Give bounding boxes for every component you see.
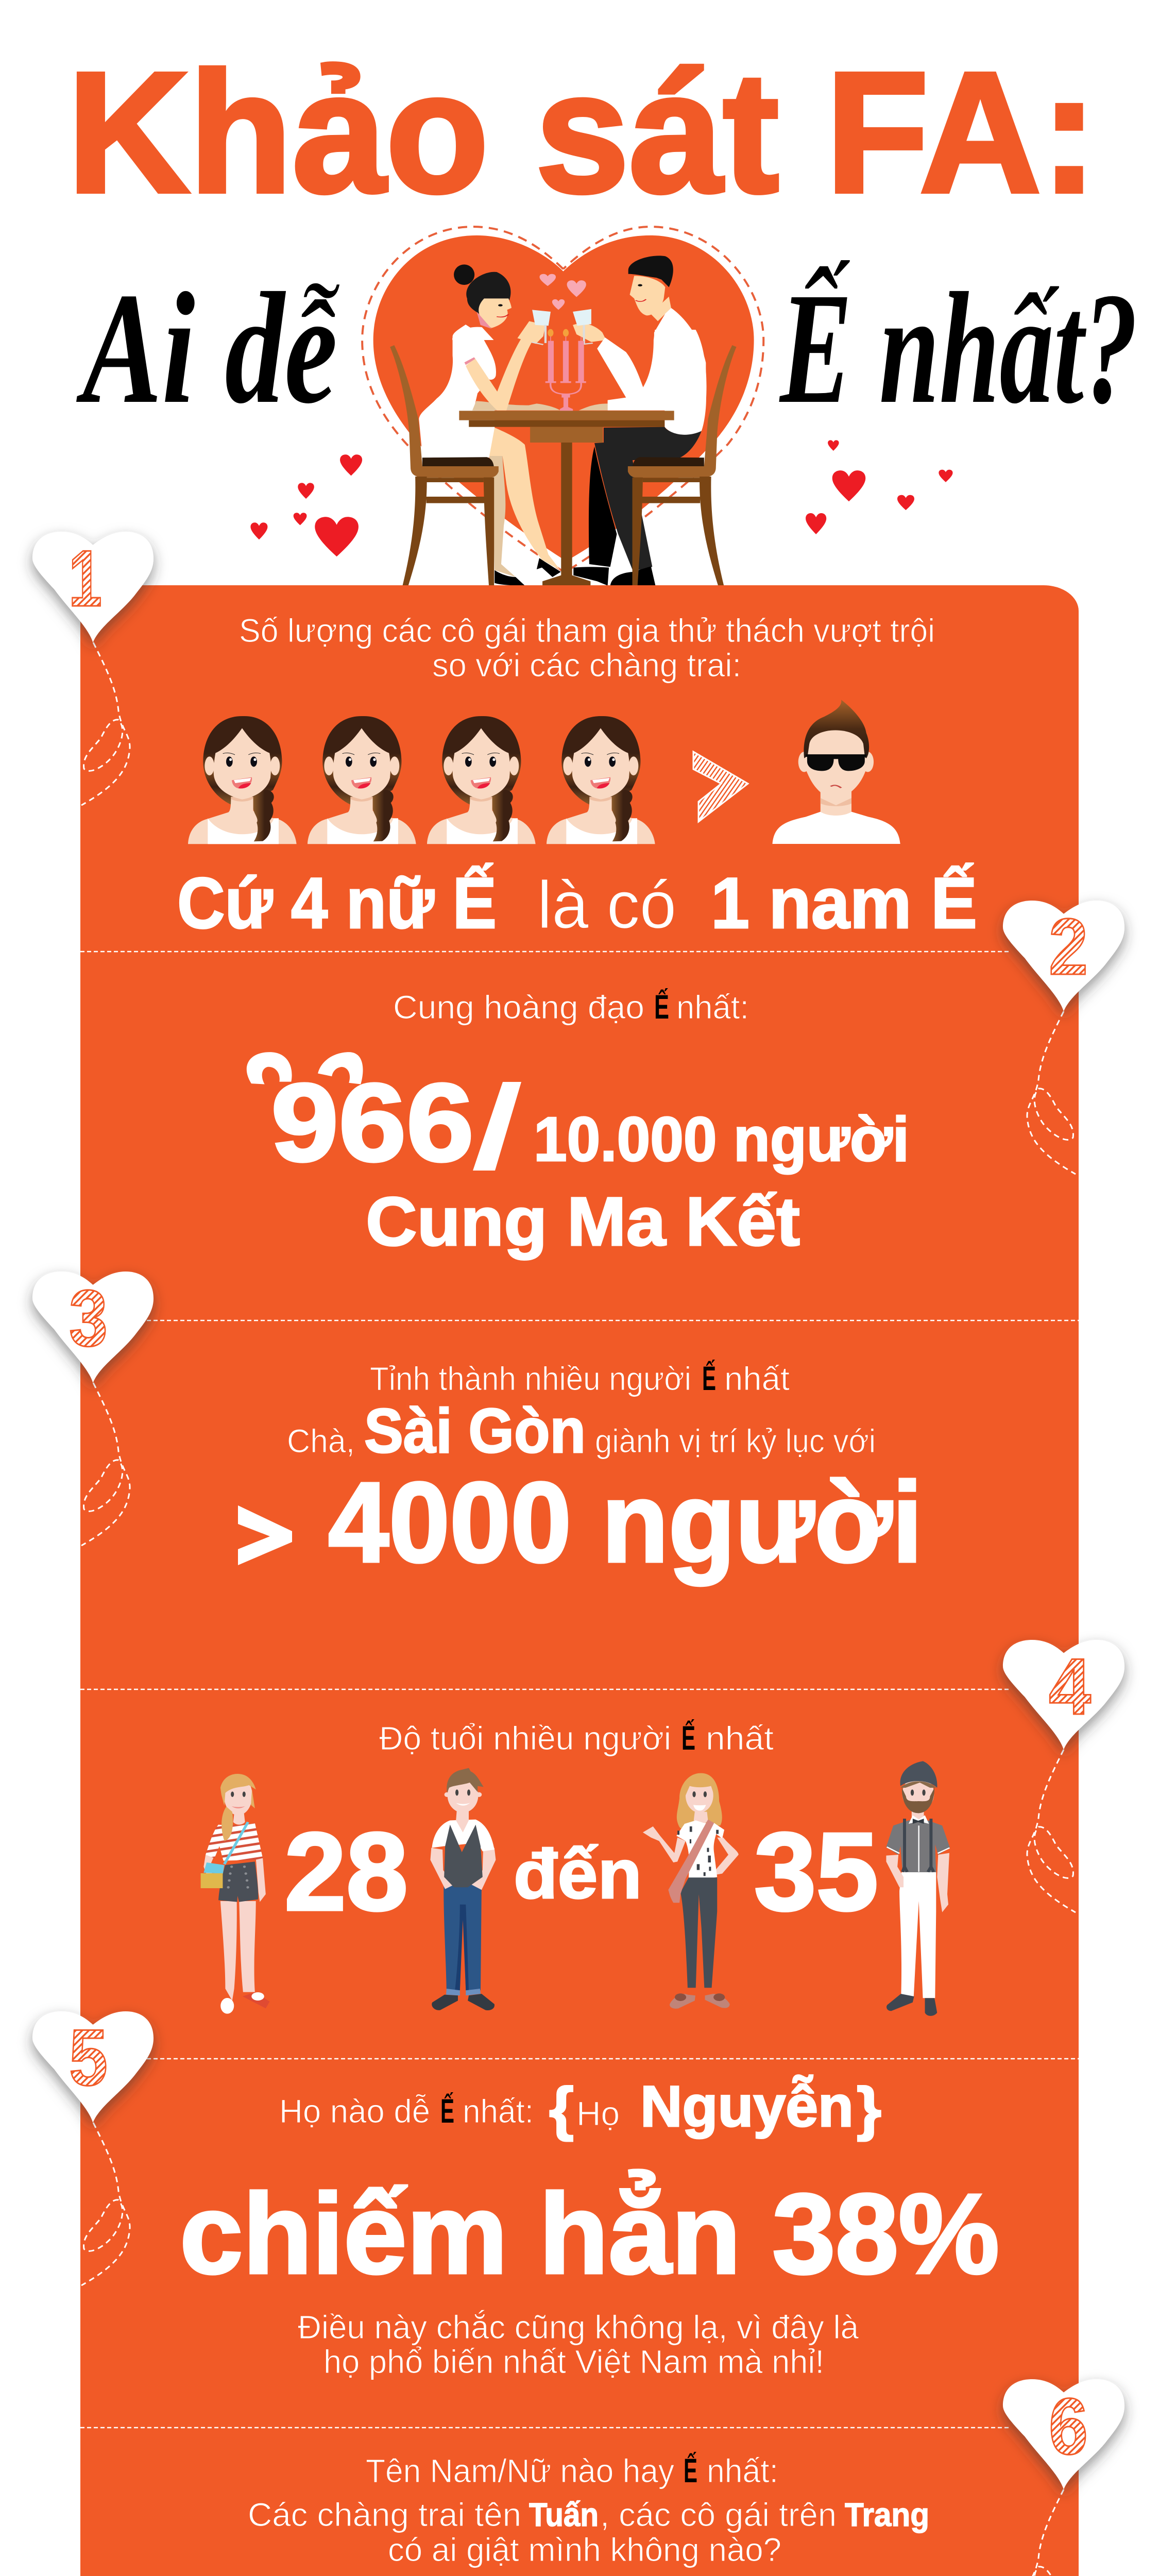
section 6: names sentence: Các chàng trai tên xyxy=(248,2496,521,2533)
section 5: note: họ phổ biến nhất Việt Nam mà nhỉ! xyxy=(323,2343,824,2380)
section 6: heading: Tên Nam/Nữ nào hay xyxy=(366,2452,674,2489)
stat: 966 of 10,000: 10.000 người xyxy=(534,1104,909,1174)
section dividers xyxy=(80,952,1079,2576)
section 6: names sentence xyxy=(248,2496,929,2568)
heart backdrop xyxy=(362,227,763,572)
section 6: names sentence: Trang xyxy=(845,2496,929,2533)
panel: orange survey card xyxy=(80,585,1079,2576)
stat: 38 percent: chiếm hẳn 38% xyxy=(180,2170,999,2297)
character: girl in striped top xyxy=(201,1774,270,2014)
section 6: names sentence: Tuấn xyxy=(529,2496,599,2533)
heart badge 5: 5 xyxy=(69,2013,108,2102)
script subtitle left: Ai dễ xyxy=(75,260,340,437)
heart badge 3: 3 xyxy=(69,1274,108,1363)
section 6: heading: nhất: xyxy=(707,2452,778,2489)
stat: over 4000 people: 4000 người xyxy=(328,1459,923,1586)
headline: 4 women per 1 man xyxy=(177,862,977,943)
icon: boy with sunglasses xyxy=(772,700,900,844)
heart badge 1: 1 xyxy=(69,534,102,623)
section 6: names sentence: , các cô gái trên xyxy=(600,2496,837,2533)
section 4: heading: Ế xyxy=(681,1719,695,1757)
section 4: heading: Độ tuổi nhiều người xyxy=(379,1720,671,1757)
section 5: heading with surname: { xyxy=(549,2076,574,2142)
section 3: Saigon sentence: Chà, xyxy=(287,1422,355,1460)
section 3: heading: Ế xyxy=(702,1359,716,1397)
section 2: heading: Ế xyxy=(654,988,669,1026)
section 5: heading with surname: Nguyễn xyxy=(640,2074,854,2139)
heart badge 5 xyxy=(32,2011,154,2123)
decorative red hearts xyxy=(250,440,953,556)
section 1: intro text xyxy=(239,612,935,684)
section 2: heading xyxy=(393,988,749,1026)
heart badge 1 xyxy=(32,532,154,642)
heart trail lines xyxy=(81,642,1076,2576)
section 5: heading with surname: Ế xyxy=(440,2092,454,2130)
icon: ram horns xyxy=(247,1052,363,1084)
section 5: heading with surname: Họ xyxy=(576,2094,620,2132)
icon: four girls xyxy=(188,716,655,844)
headline: 4 women per 1 man: Cứ 4 nữ Ế xyxy=(177,862,497,943)
stat: 35: 35 xyxy=(754,1809,878,1934)
chairs, table and figures xyxy=(390,325,737,586)
character: girl with satchel xyxy=(643,1773,739,2009)
headline: 4 women per 1 man: là có xyxy=(537,867,676,942)
section 2: heading: Cung hoàng đạo xyxy=(393,989,644,1026)
section 5: heading with surname: Họ nào dễ xyxy=(279,2093,430,2130)
section 3: Saigon sentence: giành vị trí kỷ lục với xyxy=(595,1422,876,1460)
section 1: intro text: Số lượng các cô gái tham gia thử thách vượt trội xyxy=(239,612,935,649)
section 5: heading with surname xyxy=(279,2074,881,2142)
stat: 966 of 10,000: 966 xyxy=(271,1060,474,1184)
section 3: Saigon sentence xyxy=(287,1396,876,1466)
heart badge 4 xyxy=(1003,1640,1124,1750)
section 5: note xyxy=(298,2309,859,2380)
section 5: heading with surname: } xyxy=(857,2076,881,2142)
icon: greater-than chevron xyxy=(693,752,748,822)
section 5: note: Điều này chắc cũng không lạ, vì đây là xyxy=(298,2309,859,2346)
character: boy with vest xyxy=(430,1768,496,2010)
heart badge 6: 6 xyxy=(1049,2382,1088,2471)
stat: 966 of 10,000 xyxy=(271,1060,909,1184)
main title: Khảo sát FA: xyxy=(67,37,1097,228)
section 3: heading: Tỉnh thành nhiều người xyxy=(370,1360,691,1397)
section 4: heading: nhất xyxy=(706,1720,774,1757)
section 6: heading: Ế xyxy=(684,2451,697,2489)
heart badge 2 xyxy=(1003,901,1124,1011)
section 5: heading with surname: nhất: xyxy=(463,2093,534,2130)
headline: 4 women per 1 man: 1 nam Ế xyxy=(711,862,977,943)
character: man with beanie xyxy=(886,1761,950,2016)
word: to: đến xyxy=(514,1835,642,1913)
section 2: heading: nhất: xyxy=(676,989,749,1026)
heart badge 2: 2 xyxy=(1049,902,1088,991)
illustration: couple at table inside heart xyxy=(362,227,763,586)
section 3: Saigon sentence: Sài Gòn xyxy=(364,1396,586,1466)
section 6: names sentence: có ai giật mình không nào? xyxy=(388,2531,781,2568)
stat label: Capricorn: Cung Ma Kết xyxy=(366,1183,800,1260)
heart badge 6 xyxy=(1003,2379,1124,2489)
section 3: heading: nhất xyxy=(724,1360,790,1397)
stat: 28: 28 xyxy=(284,1809,408,1934)
heart badge 3 xyxy=(32,1272,154,1383)
heart badge 4: 4 xyxy=(1049,1642,1091,1731)
section 1: intro text: so với các chàng trai: xyxy=(432,647,741,684)
